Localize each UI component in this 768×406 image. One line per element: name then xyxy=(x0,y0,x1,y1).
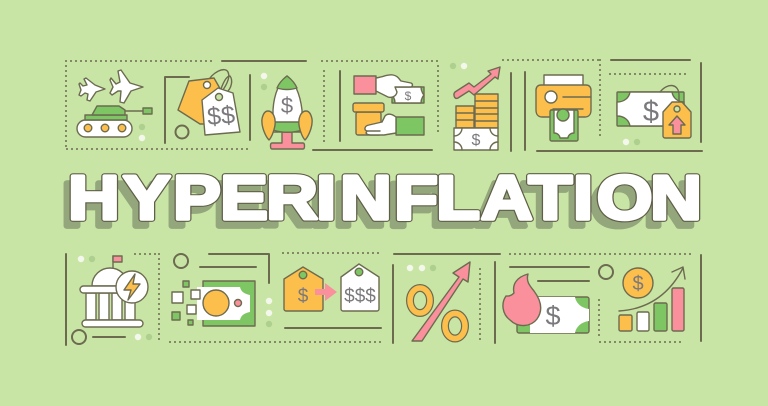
icon: growth chart with coin xyxy=(619,267,685,331)
icon: price tags: $$ xyxy=(206,101,236,131)
icon: price tags rising xyxy=(284,264,379,311)
top frame lines and dots xyxy=(66,60,702,151)
icon: tank xyxy=(77,106,152,137)
icon: burning banknote: $ xyxy=(545,301,561,331)
icon: price tags rising: $$$ xyxy=(344,286,376,307)
icon: rocket xyxy=(262,76,312,149)
icon: hands exchanging money for goods: $ xyxy=(405,89,412,103)
icon: government building with lightning xyxy=(80,256,148,327)
icon: fighter jets xyxy=(79,70,143,103)
icon: percent with rising arrow xyxy=(410,262,470,341)
icon: banknote with raised price tag xyxy=(617,86,691,138)
icon: banknote with raised price tag: $ xyxy=(643,96,659,128)
icon: growth chart with coin: $ xyxy=(632,273,644,295)
icon: dissolving banknote xyxy=(172,281,255,326)
icon: burning banknote xyxy=(503,274,589,333)
title: HYPERINFLATION: HYPERINFLATION xyxy=(68,164,702,233)
title: HYPERINFLATION: HYPERINFLATION xyxy=(68,164,702,233)
icon: printer printing money xyxy=(536,75,591,141)
icon: price tags xyxy=(178,70,240,135)
title: HYPERINFLATION: HYPERINFLATION xyxy=(62,171,696,240)
icon: rocket: $ xyxy=(281,93,293,118)
bottom frame lines and dots xyxy=(66,253,701,345)
icon: rising coin stacks: $ xyxy=(472,132,481,149)
icon: price tags rising: $ xyxy=(298,286,309,307)
icon: rising coin stacks xyxy=(454,67,500,150)
icon: hands exchanging money for goods xyxy=(353,75,424,135)
